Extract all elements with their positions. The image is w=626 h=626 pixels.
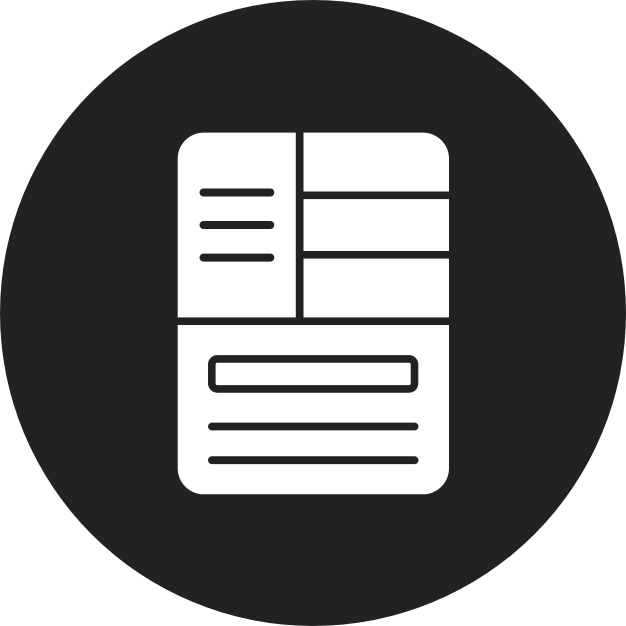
right column row dividers [303, 192, 450, 259]
document page [177, 132, 450, 494]
vertical divider of top section [296, 132, 304, 322]
page body [178, 133, 449, 494]
bottom text lines [208, 423, 418, 464]
horizontal divider between top and bottom sections [177, 317, 450, 325]
outlined button [212, 359, 414, 389]
left column text lines [200, 188, 274, 262]
